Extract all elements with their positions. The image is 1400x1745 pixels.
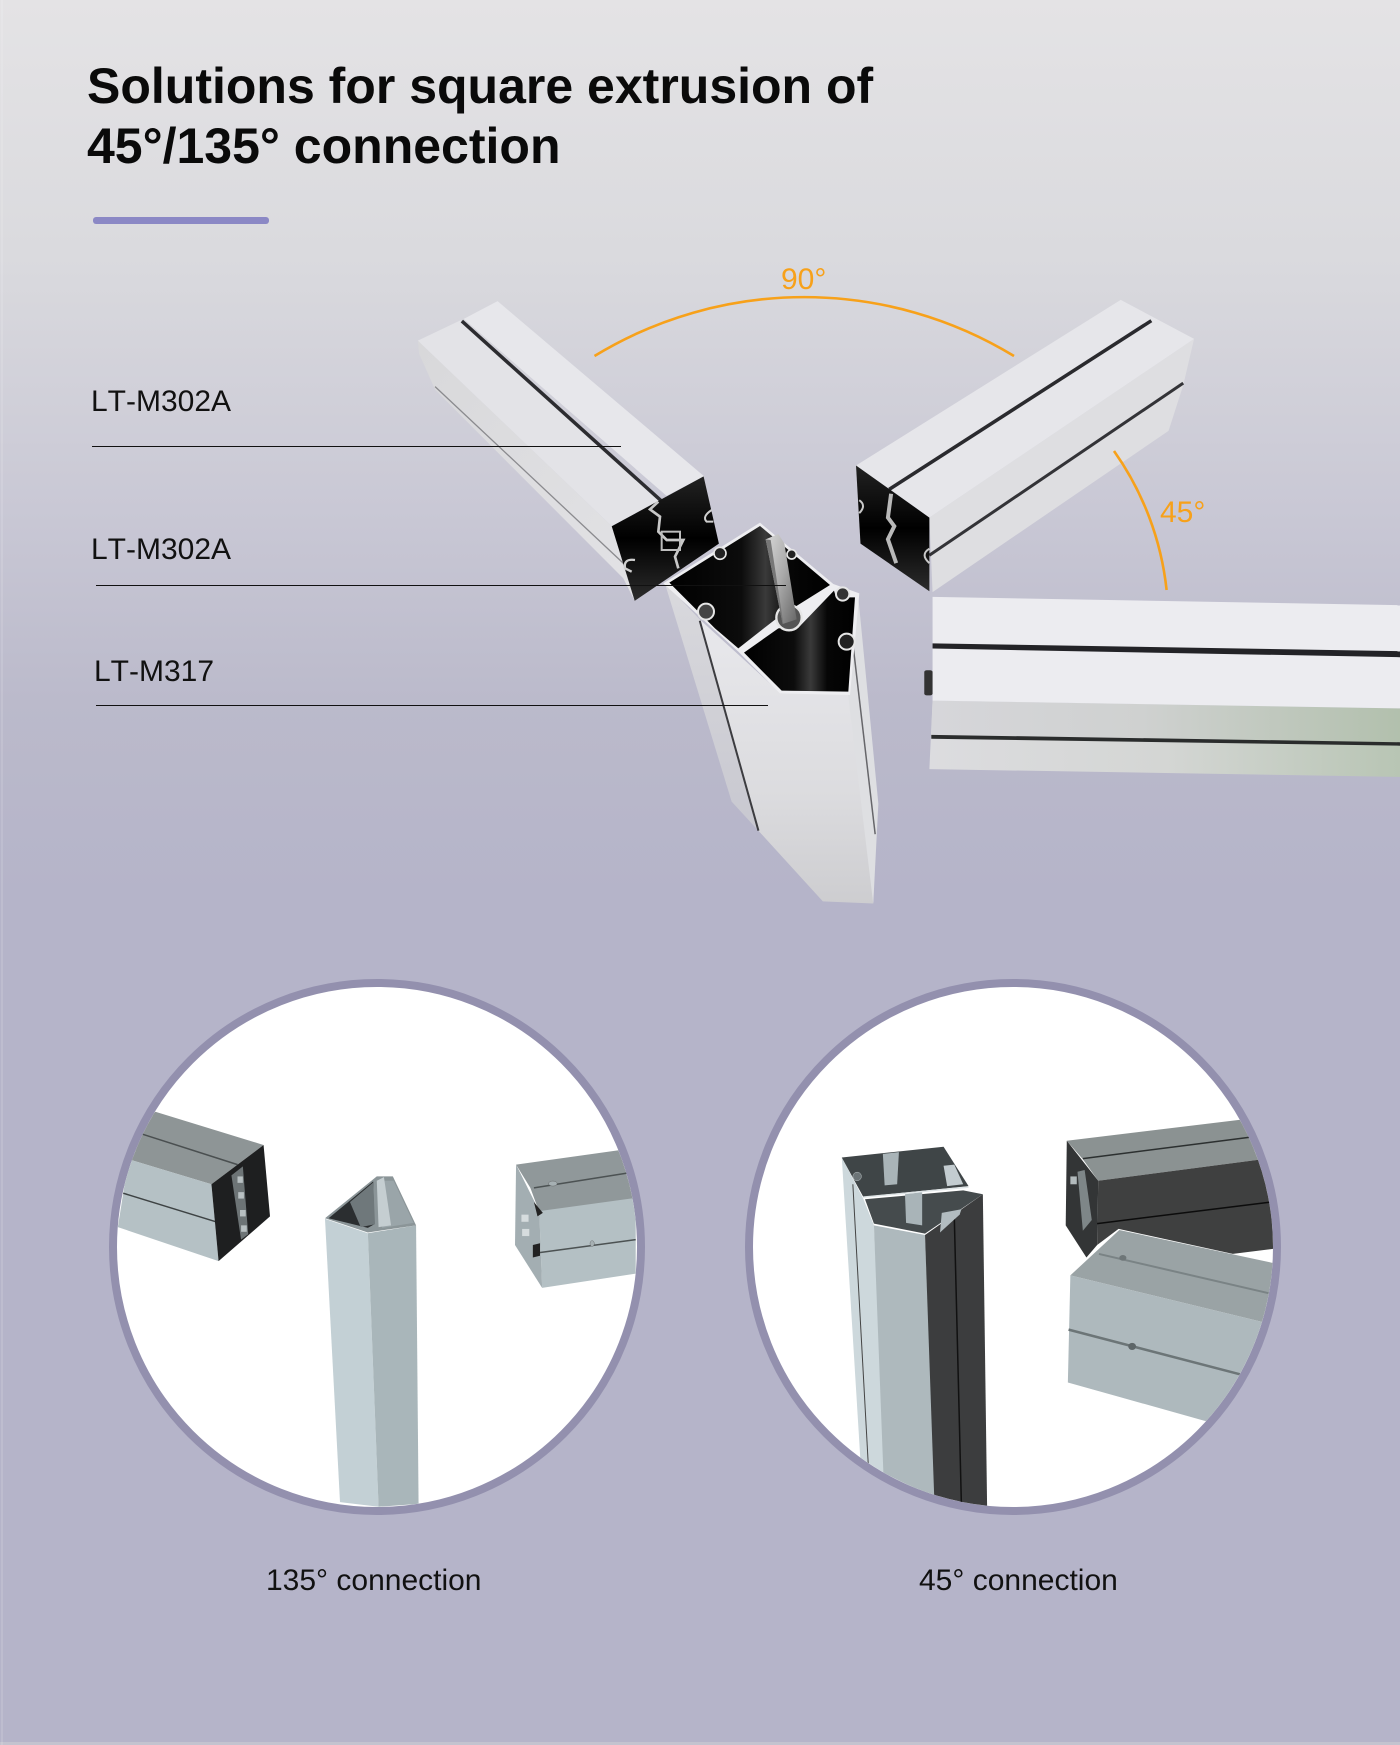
extrusion end details [625,502,859,695]
135 left beam [118,1112,270,1261]
angle arc: 45 degrees: 45° [1160,496,1205,529]
45 lower beam [1068,1230,1276,1427]
caption: 45 connection: 45° connection [919,1564,1118,1597]
135 right beam [515,1149,636,1288]
45 upper beam [1066,1116,1276,1257]
product diagram: exploded extrusion joint [418,300,1400,904]
label: LT-M317: LT-M317 [94,655,214,688]
upper-right beam: LT-M302A [856,300,1194,592]
caption: 135 connection: 135° connection [266,1564,482,1597]
right beam: LT-M302A [924,597,1400,777]
panel: 135 degree connection detail [113,983,641,1511]
angle arc: 90 degrees [594,263,1014,356]
panel: 45 degree connection detail [749,983,1277,1511]
center column: LT-M317 [665,583,878,904]
title: Solutions for square extrusion of [87,58,873,114]
angle arc: 45 degrees [1114,451,1205,590]
label: LT-M302A middle: LT-M302A [91,533,231,566]
upper-left beam: LT-M302A [418,301,719,601]
label: LT-M302A upper: LT-M302A [91,385,231,418]
title: 45°/135° connection [87,118,560,174]
135 center column [325,1176,419,1507]
angle arc: 90 degrees: 90° [781,263,826,296]
45 column [842,1147,987,1509]
title accent bar [93,217,269,224]
